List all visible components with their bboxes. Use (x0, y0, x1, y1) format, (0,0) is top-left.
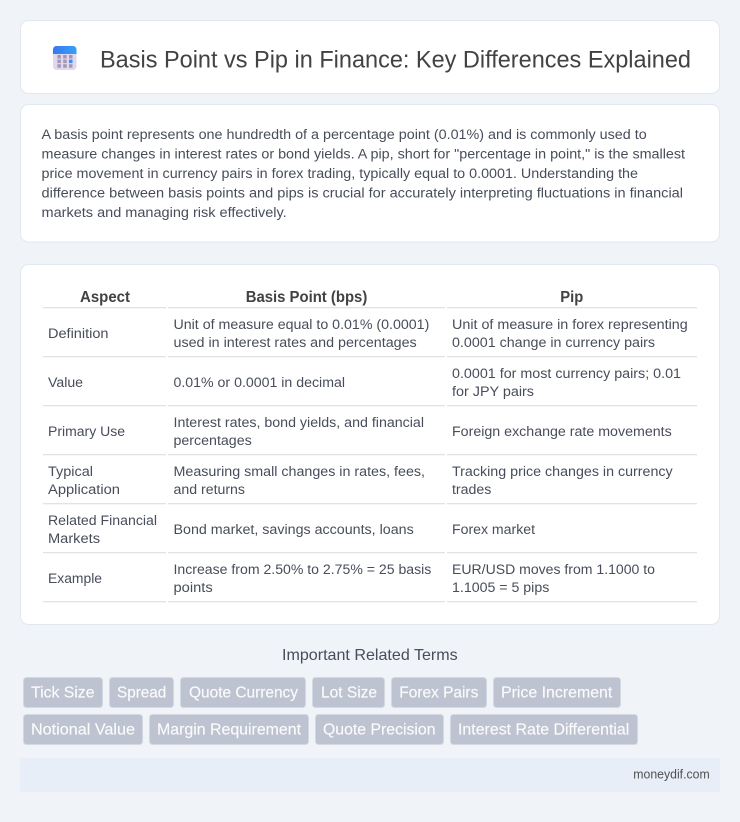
table row: primary use: percentages (174, 433, 252, 449)
table row: value (43, 366, 697, 406)
text block: introduction paragraph: difference between basis points and pips is crucial for accurately interpreting fluctuations in financial (42, 186, 683, 202)
table row: definition: Unit of measure equal to 0.01% (0.0001) (174, 317, 429, 333)
table row: example: Increase from 2.50% to 2.75% = 25 basis (174, 562, 431, 578)
table row: definition (43, 317, 697, 357)
text block: introduction paragraph: price movement in currency pairs in forex trading, typically equal to 0.0001. Understanding the (42, 166, 638, 182)
table row: typical application: Application (48, 482, 120, 498)
tag: notional value: Notional Value (31, 722, 135, 739)
table header row (43, 289, 697, 308)
table header row: Aspect (80, 289, 130, 306)
tag: interest rate differential: Interest Rate Differential (458, 722, 629, 739)
table row: related financial markets: Bond market, savings accounts, loans (174, 522, 414, 538)
tag: notional value (24, 714, 142, 744)
text block: introduction paragraph (42, 127, 685, 221)
tag: tick size (24, 678, 102, 708)
table header row: Pip (560, 289, 583, 306)
tag: margin requirement (150, 714, 308, 744)
table row: value: Value (48, 375, 83, 391)
table row: example: EUR/USD moves from 1.1000 to (452, 562, 655, 578)
table row: primary use: Foreign exchange rate movements (452, 424, 672, 440)
table row: value: 0.01% or 0.0001 in decimal (174, 375, 345, 391)
tag: price increment (494, 678, 620, 708)
table row: typical application: Typical (48, 464, 93, 480)
tag: forex pairs: Forex Pairs (399, 684, 478, 702)
table row: value: 0.0001 for most currency pairs; 0.01 (452, 366, 681, 382)
tag: quote currency: Quote Currency (189, 684, 298, 702)
tag: spread (110, 678, 174, 708)
tag: interest rate differential (450, 714, 638, 744)
table row: typical application (43, 464, 697, 504)
tag list: related terms (24, 678, 638, 744)
footer source text: moneydif.com (633, 768, 710, 782)
table row: definition: Definition (48, 326, 108, 342)
panel: comparison table (20, 264, 720, 624)
title: Basis Point vs Pip in Finance: Key Differences Explained (100, 46, 691, 73)
table row: primary use: Primary Use (48, 424, 125, 440)
table row: typical application: trades (452, 482, 491, 498)
table header row: Basis Point (bps) (246, 289, 367, 306)
tag: quote currency (180, 678, 306, 708)
table row: related financial markets: Related Financial (48, 513, 157, 529)
tag: forex pairs (392, 678, 486, 708)
table row: example (43, 562, 697, 602)
table row: primary use: Interest rates, bond yields, and financial (174, 415, 424, 431)
table row: typical application: and returns (174, 482, 245, 498)
tag: spread: Spread (117, 684, 166, 702)
table row: definition: 0.0001 change in currency pairs (452, 335, 655, 351)
footer (20, 758, 720, 792)
tag: lot size (312, 678, 384, 708)
panel: header (20, 20, 720, 94)
table row: value: for JPY pairs (452, 384, 534, 400)
tag: quote precision (316, 714, 444, 744)
table row: typical application: Measuring small changes in rates, fees, (174, 464, 425, 480)
text block: introduction paragraph: markets and managing risk effectively. (42, 205, 287, 221)
table row: typical application: Tracking price changes in currency (452, 464, 674, 480)
heading: important related terms: Important Related Terms (282, 647, 458, 664)
table row: related financial markets: Forex market (452, 522, 535, 538)
panel: introduction (20, 104, 720, 242)
table row: definition: Unit of measure in forex representing (452, 317, 688, 333)
tag: quote precision: Quote Precision (323, 722, 436, 739)
tag: tick size: Tick Size (31, 684, 95, 702)
icon: calendar (53, 46, 76, 70)
text block: introduction paragraph: A basis point represents one hundredth of a percentage point (0.01%) and is commonly used to (42, 127, 647, 143)
table row: related financial markets (43, 513, 697, 553)
tag: lot size: Lot Size (321, 684, 377, 702)
table row: primary use (43, 415, 697, 455)
table row: example: points (174, 580, 213, 596)
tag: price increment: Price Increment (501, 684, 613, 702)
table row: related financial markets: Markets (48, 531, 100, 547)
table row: definition: used in interest rates and percentages (174, 335, 417, 351)
table row: example: Example (48, 571, 102, 587)
tag: margin requirement: Margin Requirement (157, 722, 302, 739)
table row: example: 1.1005 = 5 pips (452, 580, 549, 596)
text block: introduction paragraph: measure changes in interest rates or bond yields. A pip, short for "percentage in point," is the smallest (42, 147, 685, 163)
